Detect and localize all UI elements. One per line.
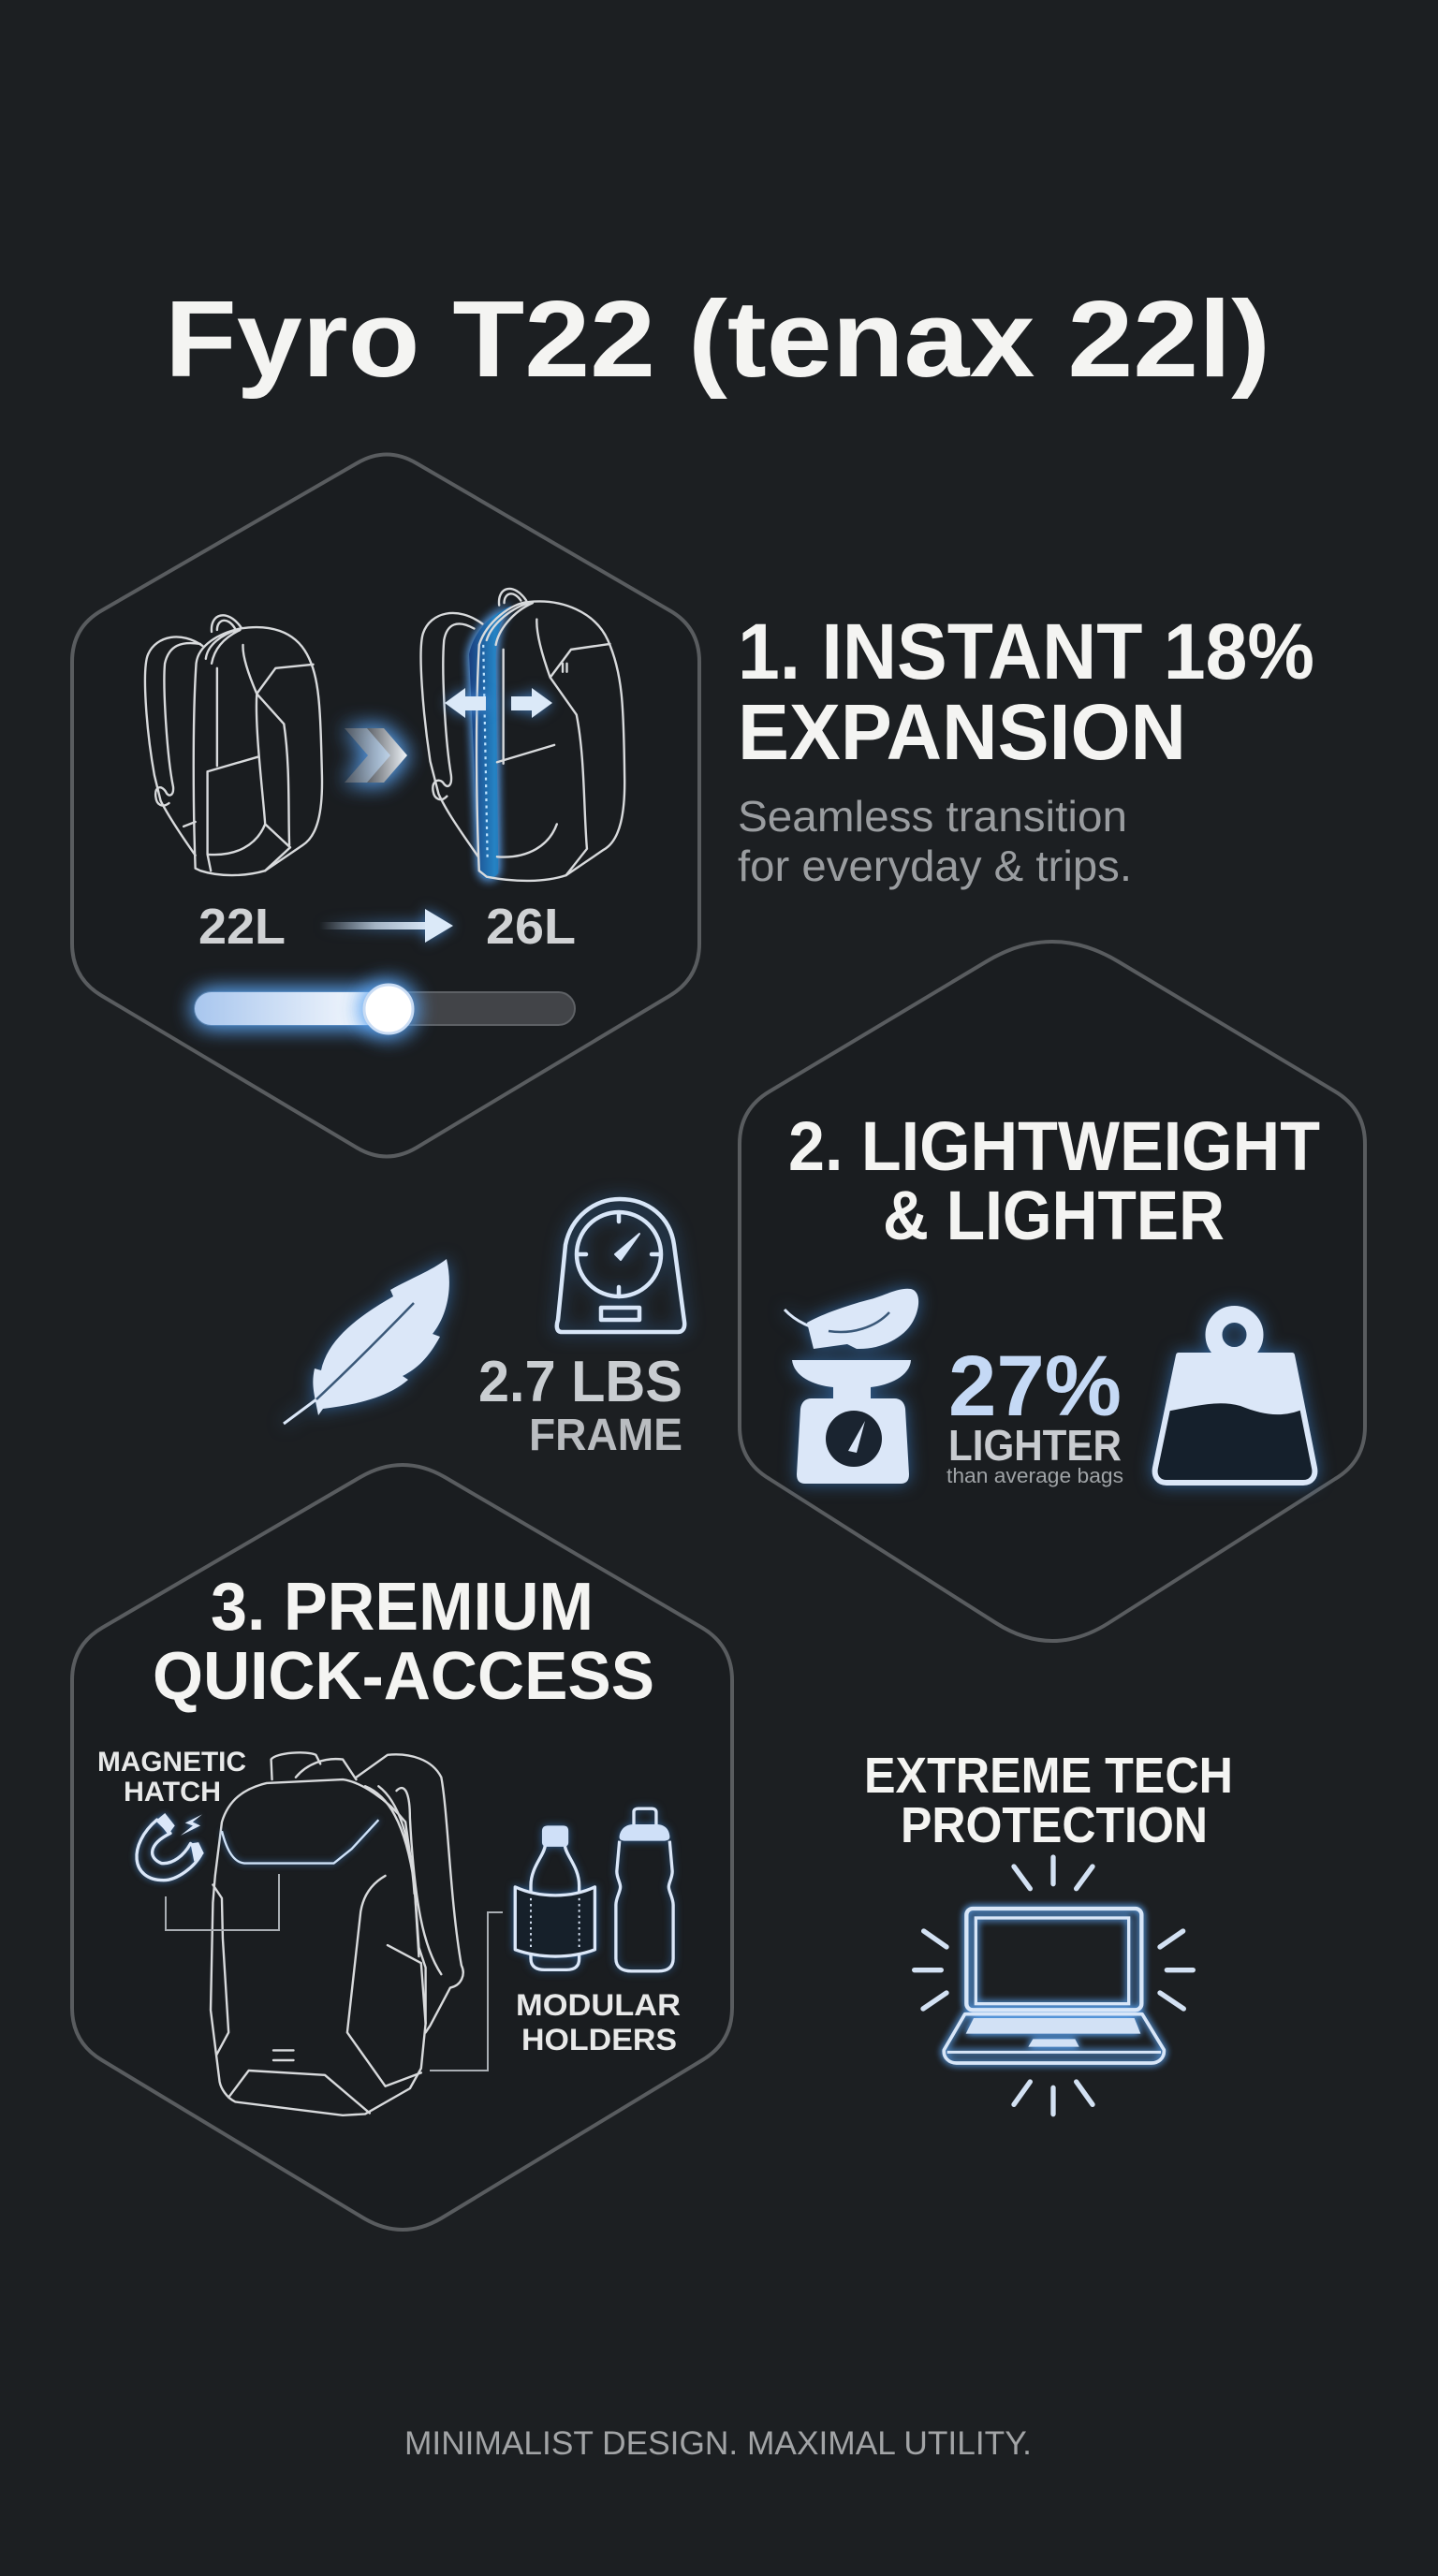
heading 3: 3. PREMIUM <box>211 1570 594 1645</box>
capacity slider <box>195 985 575 1033</box>
stat: 2.7 lbs frame: 2.7 LBS <box>478 1350 682 1414</box>
heading 2: 2. LIGHTWEIGHT <box>788 1107 1320 1185</box>
backpack line art <box>211 1752 463 2115</box>
label: modular holders: HOLDERS <box>521 2023 677 2056</box>
panel: expansion hexagon <box>72 455 699 1157</box>
panel: lightweight hexagon <box>740 942 1365 1641</box>
heading 2: & LIGHTER <box>883 1177 1225 1254</box>
hexagon outline 2 <box>740 942 1365 1641</box>
impact rays <box>915 1857 1193 2115</box>
heading: extreme tech protection: PROTECTION <box>901 1797 1208 1853</box>
heading 1 <box>738 607 1314 776</box>
laptop <box>944 1909 1164 2063</box>
stat: 27% lighter: than average bags <box>946 1464 1123 1487</box>
heading 3 <box>153 1570 654 1714</box>
label: modular holders: MODULAR <box>516 1988 681 2022</box>
icon: bottle in holder <box>515 1825 594 1969</box>
label 22L: 22L <box>198 899 286 955</box>
icon: feather large <box>284 1259 449 1424</box>
glowing hatch flap <box>222 1820 378 1864</box>
expanded backpack lines <box>421 589 624 881</box>
backpack before <box>145 615 322 875</box>
icon: magnet <box>137 1813 204 1881</box>
panel: quick-access hexagon <box>72 1465 732 2230</box>
stat: 27% lighter <box>946 1339 1123 1487</box>
chevrons <box>345 728 407 783</box>
stat: 2.7 lbs frame: FRAME <box>529 1411 682 1460</box>
subtext 1 <box>738 792 1132 890</box>
hexagon outline 1 <box>72 455 699 1157</box>
hexagon outline 3 <box>72 1465 732 2230</box>
label: modular holders <box>516 1988 681 2056</box>
volume arrow <box>319 909 453 943</box>
heading: extreme tech protection <box>864 1748 1233 1853</box>
icon: weight <box>1155 1314 1314 1483</box>
footer tagline: MINIMALIST DESIGN. MAXIMAL UTILITY. <box>404 2425 1032 2462</box>
subtext 1: Seamless transition <box>738 792 1127 841</box>
stat: 2.7 lbs frame <box>478 1350 682 1460</box>
glowing expansion band <box>469 606 512 879</box>
heading 1: 1. INSTANT 18% <box>738 607 1314 695</box>
heading: extreme tech protection: EXTREME TECH <box>864 1748 1233 1804</box>
icon: dial scale <box>557 1199 684 1332</box>
heading 3: QUICK-ACCESS <box>153 1639 654 1714</box>
heading 1: EXPANSION <box>738 688 1186 776</box>
title: Fyro T22 (tenax 22l) <box>165 278 1270 400</box>
label: magnetic hatch: MAGNETIC <box>97 1747 246 1778</box>
heading 2 <box>788 1107 1320 1254</box>
icon: sports bottle <box>616 1808 673 1971</box>
stat: 27% lighter: 27% <box>948 1339 1122 1434</box>
connector: holders <box>430 1912 503 2071</box>
double arrows <box>445 688 552 718</box>
icon: laptop with rays <box>915 1857 1193 2115</box>
label: magnetic hatch: HATCH <box>124 1777 221 1808</box>
label 26L: 26L <box>486 899 576 955</box>
label: magnetic hatch <box>97 1747 246 1808</box>
stat: 27% lighter: LIGHTER <box>948 1421 1122 1470</box>
connector: hatch <box>166 1874 279 1930</box>
subtext 1: for everyday & trips. <box>738 842 1132 890</box>
icon: feather on kitchen scale <box>785 1289 918 1484</box>
backpack expanded <box>421 589 624 881</box>
